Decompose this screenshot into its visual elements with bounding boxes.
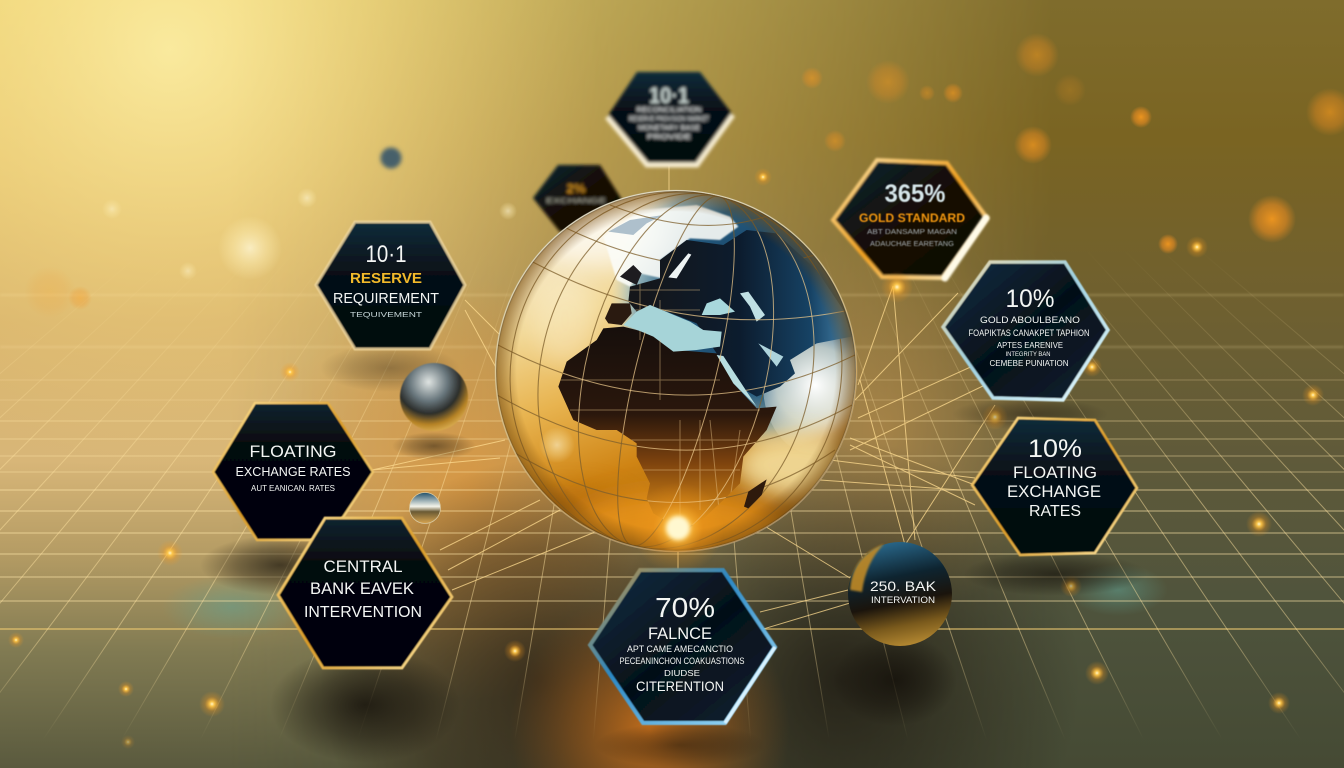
hexagon: central bank intervention: CENTRAL <box>324 557 402 576</box>
hexagon: 10:1 reserve requirement: TEQUIVEMENT <box>350 310 423 319</box>
hexagon: 70% balance: DIUDSE <box>664 669 700 678</box>
hexagon: top 10:1 (out of focus) <box>607 72 733 165</box>
sphere: 250 bak intervention <box>848 542 952 646</box>
hexagon: 70% balance: CITERENTION <box>636 678 724 694</box>
hexagon: 365% gold standard <box>833 160 987 303</box>
globe <box>494 190 858 568</box>
hexagon: 70% balance: FALNCE <box>648 624 712 643</box>
hexagon: 10:1 reserve requirement: 10·1 <box>366 241 406 268</box>
hexagon: back 2% (out of focus): EXCHANGE <box>546 198 606 205</box>
hexagon: 10:1 reserve requirement: RESERVE <box>350 270 422 287</box>
sphere: 250 bak intervention: INTERVATION <box>871 595 935 606</box>
hexagon: 10:1 reserve requirement: REQUIREMENT <box>333 290 439 307</box>
hexagon: top 10:1 (out of focus): RECONCILIATION <box>636 107 702 114</box>
perspective grid <box>0 157 1344 740</box>
hexagon: 365% gold standard: GOLD STANDARD <box>859 211 965 225</box>
hexagon: back 2% (out of focus): 2% <box>567 181 586 196</box>
hexagon: 70% balance: PECEANINCHON COAKUASTIONS <box>620 656 744 666</box>
hexagon: 10% floating exchange rates: RATES <box>1029 503 1081 520</box>
hexagon: floating exchange rates, left <box>213 403 373 540</box>
globe: grid lines on ocean <box>498 191 855 550</box>
sphere: chrome, mid left <box>400 363 468 431</box>
hexagon: back 2% (out of focus) <box>533 165 622 232</box>
small blurred sphere, back left <box>380 148 402 168</box>
hexagon: 10% gold, right: GOLD ABOULBEANO <box>980 315 1080 325</box>
hexagon: central bank intervention: INTERVENTION <box>304 604 422 621</box>
globe: continents <box>558 230 852 525</box>
hexagon: 10% gold, right <box>943 262 1108 400</box>
hexagon: top 10:1 (out of focus): 10·1 <box>649 83 689 108</box>
hexagon: floating exchange rates, left: FLOATING <box>250 442 336 461</box>
hexagon: floating exchange rates, left: AUT EANICAN. RATES <box>251 484 335 493</box>
hexagon: 10% gold, right: APTES EARENIVE <box>997 340 1063 350</box>
hexagon: top 10:1 (out of focus): MONETARY BASE <box>638 125 700 132</box>
hexagon: 10% gold, right: CEMEBE PUNIATION <box>990 358 1068 368</box>
hexagon: central bank intervention <box>278 518 452 668</box>
hexagon: 10% floating exchange rates: 10% <box>1028 435 1082 463</box>
sphere: small chrome <box>410 492 440 524</box>
hexagon: 365% gold standard: ABT DANSAMP MAGAN <box>867 229 957 236</box>
hexagon: 10% floating exchange rates: EXCHANGE <box>1007 482 1101 501</box>
hexagon: 10:1 reserve requirement <box>316 222 465 349</box>
hexagon: 10% gold, right: INTEGRITY BAN <box>1006 352 1050 358</box>
hexagon: 10% floating exchange rates: FLOATING <box>1013 463 1097 482</box>
hexagon: 70% balance: 70% <box>655 592 715 623</box>
hexagon: 70% balance <box>590 570 775 723</box>
connector lines from globe to nodes <box>372 165 995 630</box>
reflections under nodes <box>200 344 1147 767</box>
globe: grid lines over land <box>560 231 844 525</box>
globe: ocean tint and highlights <box>530 191 856 551</box>
hexagon: 10% gold, right: FOAPIKTAS CANAKPET TAPHION <box>968 328 1090 338</box>
hexagon: top 10:1 (out of focus): PROVIDE <box>647 134 691 141</box>
sphere: 250 bak intervention: 250. BAK <box>870 578 937 594</box>
hexagon: 10% floating exchange rates <box>972 418 1137 555</box>
hexagon: 10% gold, right: 10% <box>1006 285 1054 313</box>
hexagon: 365% gold standard: ADAUCHAE EARETANG <box>870 241 954 248</box>
hexagon: 365% gold standard: 365% <box>884 180 946 208</box>
hexagon: central bank intervention: BANK EAVEK <box>310 579 415 598</box>
hexagon: floating exchange rates, left: EXCHANGE RATES <box>236 464 351 479</box>
hexagon: 70% balance: APT CAME AMECANCTIO <box>627 644 733 654</box>
hexagon: top 10:1 (out of focus): RESERVE PROVISION MARKET <box>629 116 710 123</box>
globe: arctic ice <box>603 205 738 287</box>
